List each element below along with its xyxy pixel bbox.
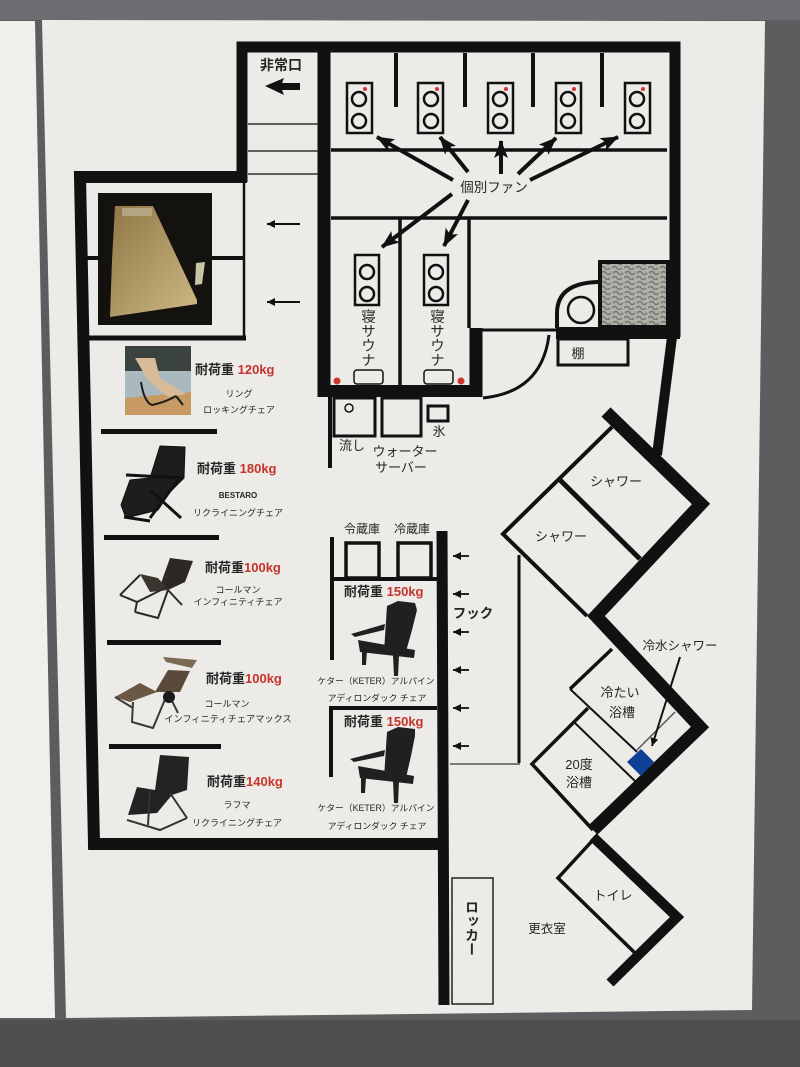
baths bbox=[450, 555, 718, 830]
chair drawing bbox=[120, 558, 193, 618]
shower label 1: シャワー bbox=[590, 474, 642, 489]
stone sauna heater bbox=[557, 262, 668, 328]
cold bath label: 冷たい bbox=[600, 685, 640, 700]
load label: 耐荷重 120kg bbox=[195, 362, 275, 377]
thick exterior zigzag wall bbox=[593, 412, 701, 830]
Adirondack chair 1 bbox=[351, 601, 417, 676]
photo: bed sauna bbox=[98, 193, 212, 325]
bed room partitions and photo bbox=[87, 182, 246, 340]
photo of rocking chair bbox=[125, 346, 191, 415]
shower label 2: シャワー bbox=[535, 529, 587, 544]
chair name line 2: リクライニングチェア bbox=[193, 507, 283, 518]
chair drawing bbox=[115, 657, 197, 728]
fridge boxes bbox=[346, 543, 431, 578]
bed sauna label left: 寝サウナ bbox=[359, 309, 375, 367]
ice label: 氷 bbox=[432, 424, 446, 439]
chair: Coleman Infinity bbox=[120, 558, 283, 618]
fan label: 個別ファン bbox=[460, 180, 528, 195]
chair name 2: ケター（KETER）アルパイン bbox=[317, 803, 435, 813]
load label: 耐荷重140kg bbox=[207, 774, 283, 789]
water server label: ウォーター bbox=[372, 444, 438, 459]
emergency exit arrow bbox=[265, 78, 300, 95]
chair name line 2: ロッキングチェア bbox=[203, 404, 275, 415]
hook arrows bbox=[453, 556, 469, 746]
stair lines bbox=[248, 124, 318, 174]
chair: Lafuma bbox=[127, 755, 283, 830]
shelf: 棚 bbox=[571, 346, 585, 361]
chair: ring rocking chair bbox=[125, 346, 275, 415]
chair name: BESTARO bbox=[219, 491, 257, 500]
sink label: 流し bbox=[339, 438, 365, 453]
sink and water server bbox=[330, 397, 448, 475]
toilet label: トイレ bbox=[593, 888, 633, 903]
chair: Coleman Infinity Max bbox=[115, 657, 292, 728]
load label: 耐荷重 180kg bbox=[197, 461, 277, 476]
water server label line 2: サーバー bbox=[375, 460, 427, 475]
chair name line 2: インフィニティチェアマックス bbox=[164, 714, 292, 724]
changing room label: 更衣室 bbox=[528, 922, 566, 936]
chair name: コールマン bbox=[215, 585, 261, 595]
chair name line 2: インフィニティチェア bbox=[193, 597, 283, 607]
top sauna room bbox=[331, 53, 667, 218]
chair name: リング bbox=[225, 388, 253, 399]
locker bbox=[452, 878, 493, 1004]
load label 1: 耐荷重 150kg bbox=[344, 584, 424, 599]
locker label: ロッカー bbox=[464, 900, 480, 956]
load label 2: 耐荷重 150kg bbox=[344, 714, 424, 729]
chair drawing bbox=[121, 446, 185, 521]
hook label: フック bbox=[453, 606, 493, 621]
fridge label left: 令蔵庫 bbox=[344, 522, 380, 536]
shelf bbox=[558, 339, 628, 365]
cold shower arrow bbox=[652, 657, 680, 746]
chair name 1 line 2: アディロンダック チェア bbox=[328, 692, 426, 703]
Adirondack chair 2 bbox=[350, 727, 415, 803]
chair drawing bbox=[127, 755, 189, 830]
20 degree bath label line 2: 浴槽 bbox=[566, 775, 592, 790]
chair name: ラフマ bbox=[223, 800, 251, 810]
divider bars bbox=[101, 429, 221, 749]
load label: 耐荷重100kg bbox=[205, 560, 281, 575]
bed sauna rooms bbox=[334, 218, 469, 385]
structural walls bbox=[80, 42, 680, 1005]
chair name: コールマン bbox=[204, 699, 250, 709]
fridge label right: 冷蔵庫 bbox=[394, 522, 430, 536]
cold bath label line 2: 浴槽 bbox=[609, 705, 635, 720]
door swing bbox=[483, 335, 549, 398]
chair name 2 line 2: アディロンダック チェア bbox=[328, 820, 426, 831]
headrests bbox=[354, 370, 453, 384]
toilet bbox=[558, 837, 677, 983]
bed sauna label right: 寝サウナ bbox=[428, 309, 444, 367]
load label: 耐荷重100kg bbox=[206, 671, 282, 686]
corridor arrows bbox=[267, 224, 300, 302]
cold shower marker bbox=[627, 749, 654, 776]
20 degree bath label: 20度 bbox=[565, 757, 593, 772]
individual fan units row bbox=[347, 83, 650, 133]
bed sauna units bbox=[355, 255, 448, 305]
chair name line 2: リクライニングチェア bbox=[192, 817, 282, 828]
shower rooms bbox=[503, 427, 642, 616]
chair name 1: ケター（KETER）アルパイン bbox=[317, 676, 435, 686]
red indicator dots bbox=[363, 87, 645, 91]
fan label with arrows bbox=[377, 137, 618, 247]
red dots bbox=[334, 378, 464, 384]
emergency exit label: 非常口 bbox=[260, 57, 302, 73]
neighbouring sign panel bbox=[0, 21, 55, 1018]
fan arrows bbox=[377, 137, 618, 247]
chair: BESTARO bbox=[121, 446, 283, 521]
emergency exit bbox=[260, 57, 302, 95]
fridge and Keter chair area bbox=[317, 522, 437, 831]
cold shower label: 冷水シャワー bbox=[642, 639, 718, 653]
